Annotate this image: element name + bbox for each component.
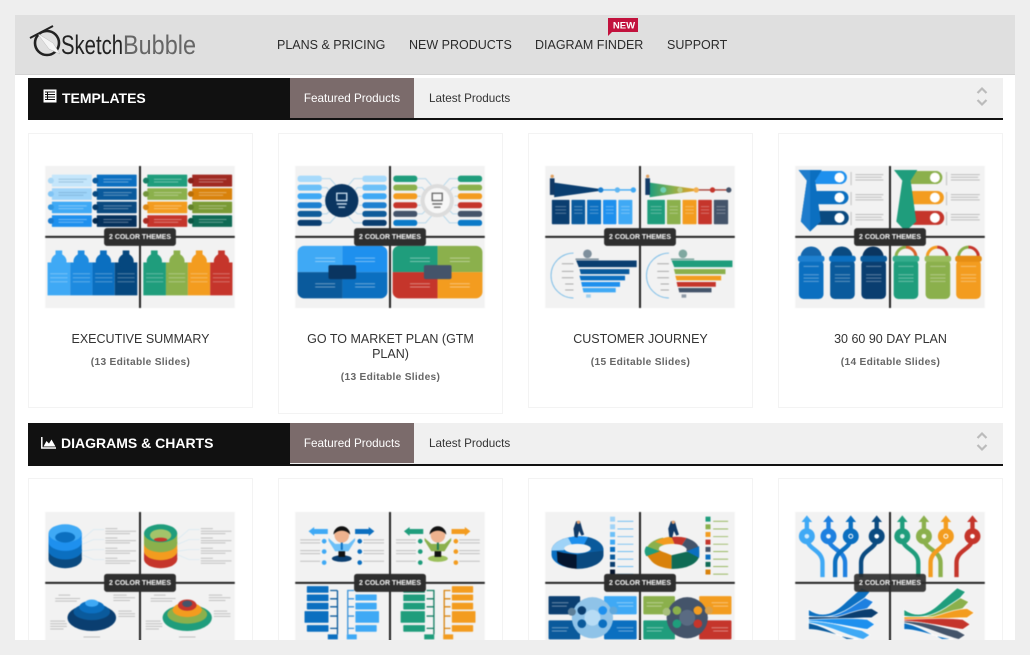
thumbnail: customer journey	[544, 165, 736, 309]
slide count: (13 Editable Slides)	[91, 357, 190, 368]
thumbnail: go to market plan	[294, 165, 486, 309]
heading: diagrams and charts: DIAGRAMS & CHARTS	[61, 435, 213, 451]
thumbnail: business person and spine diagrams: 2 COLOR THEMES	[359, 580, 421, 587]
tab: featured products: Featured Products	[304, 437, 400, 450]
product card: diagram 3	[528, 478, 753, 648]
bottom margin band	[0, 640, 1030, 655]
logo: Sketch	[61, 30, 123, 60]
slide count: (15 Editable Slides)	[591, 357, 690, 368]
new badge: NEW	[613, 20, 635, 32]
icon: scroll chevrons	[976, 87, 988, 106]
thumbnail: executive summary	[44, 165, 236, 309]
heading: templates: TEMPLATES	[62, 90, 146, 106]
thumbnail: cylinder and dome diagrams: 2 COLOR THEMES	[109, 580, 171, 587]
section header: templates	[28, 78, 1003, 120]
slide count: (13 Editable Slides)	[341, 372, 440, 383]
product card: go to market plan	[278, 133, 503, 414]
tab: featured products: Featured Products	[304, 92, 400, 105]
product card: executive summary	[28, 133, 253, 408]
new badge	[608, 18, 638, 36]
slide count: (14 Editable Slides)	[841, 357, 940, 368]
tab: featured products	[290, 423, 414, 463]
nav: new products: NEW PRODUCTS	[409, 38, 512, 52]
thumbnail: 30 60 90 day plan: 2 COLOR THEMES	[859, 234, 921, 241]
product title: CUSTOMER JOURNEY	[573, 332, 708, 346]
tab: latest products: Latest Products	[429, 92, 510, 105]
thumbnail: business person and spine diagrams	[294, 511, 486, 640]
product title: 30 60 90 DAY PLAN	[834, 332, 947, 346]
tab: featured products	[290, 78, 414, 118]
section header: diagrams and charts	[28, 423, 1003, 466]
thumbnail: 30 60 90 day plan	[794, 165, 986, 309]
product card: diagram 2	[278, 478, 503, 648]
thumbnail: arrow path diagrams	[794, 511, 986, 640]
product title: GO TO MARKET PLAN (GTM PLAN)	[307, 332, 474, 361]
thumbnail: executive summary: 2 COLOR THEMES	[109, 234, 171, 241]
tab: latest products: Latest Products	[429, 437, 510, 450]
header bar	[15, 15, 1015, 75]
logo	[30, 25, 196, 60]
nav: support: SUPPORT	[667, 38, 727, 52]
nav: diagram finder: DIAGRAM FINDER	[535, 38, 643, 52]
product card: 30 60 90 day plan	[778, 133, 1003, 408]
product card: diagram 1	[28, 478, 253, 648]
thumbnail: donut and hub diagrams: 2 COLOR THEMES	[609, 580, 671, 587]
icon: table	[44, 90, 56, 102]
thumbnail: cylinder and dome diagrams	[44, 511, 236, 640]
thumbnail: donut and hub diagrams	[544, 511, 736, 640]
product card: customer journey	[528, 133, 753, 408]
product title: EXECUTIVE SUMMARY	[72, 332, 210, 346]
icon: scroll chevrons	[976, 432, 988, 451]
icon: area chart	[41, 437, 56, 449]
product card: diagram 4	[778, 478, 1003, 648]
nav: plans and pricing: PLANS & PRICING	[277, 38, 385, 52]
thumbnail: customer journey: 2 COLOR THEMES	[609, 234, 671, 241]
thumbnail: go to market plan: 2 COLOR THEMES	[359, 234, 421, 241]
thumbnail: arrow path diagrams: 2 COLOR THEMES	[859, 580, 921, 587]
